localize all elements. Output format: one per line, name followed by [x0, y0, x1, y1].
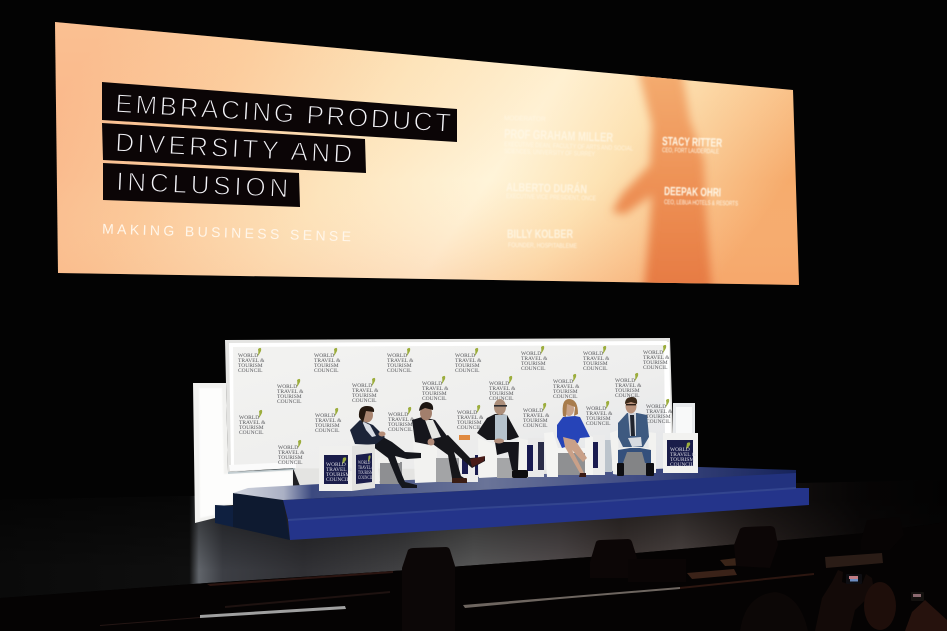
logo: TRAVEL & [553, 384, 580, 390]
logo: WORLD [615, 378, 635, 384]
logo [521, 346, 548, 372]
logo: WORLD [489, 381, 509, 387]
logo: WORLD [278, 445, 298, 451]
logo [314, 348, 341, 374]
floor [0, 480, 947, 598]
title line 1: EMBRACING PRODUCT [115, 88, 452, 138]
logo on cube side: TRAVEL & [358, 464, 374, 470]
logo on cube front: COUNCIL [326, 477, 350, 483]
logo: TOURISM [422, 391, 447, 397]
panellist 3 [477, 399, 528, 478]
speaker Stacy: STACY RITTER [662, 134, 723, 150]
logo: WORLD [238, 353, 258, 359]
logo: TRAVEL & [615, 383, 642, 389]
logo on cube front: WORLD [326, 462, 346, 468]
logo: TOURISM [278, 455, 303, 461]
logo on cube side: COUNCIL [358, 474, 373, 480]
logo: COUNCIL [352, 398, 377, 404]
logo: WORLD [315, 413, 335, 419]
logo: TRAVEL & [277, 389, 304, 395]
logo on cube front: TOURISM [326, 472, 350, 478]
logo: COUNCIL [239, 430, 264, 436]
speaker Deepak: DEEPAK OHRI [664, 184, 721, 199]
logo on cube front [326, 457, 353, 483]
subtitle: MAKING BUSINESS SENSE [102, 221, 351, 244]
logo: TOURISM [388, 422, 413, 428]
logo: COUNCIL [422, 396, 447, 402]
logo [523, 403, 550, 429]
audience with phones [740, 570, 947, 631]
logo: WORLD [352, 383, 372, 389]
speaker Billy: FOUNDER, HOSPITABLEME [508, 242, 578, 250]
speaker Alberto: ALBERTO DURÁN [506, 179, 587, 196]
table 3 [593, 435, 612, 475]
logo: TOURISM [387, 363, 412, 369]
logo: COUNCIL [277, 399, 302, 405]
speaker Deepak [664, 184, 738, 208]
logo [277, 379, 304, 405]
logo: TRAVEL & [455, 358, 482, 364]
logo: COUNCIL [314, 368, 339, 374]
logo [553, 374, 580, 400]
logo: COUNCIL [457, 425, 482, 431]
speaker Stacy [662, 134, 723, 156]
logo: COUNCIL [523, 423, 548, 429]
branded cube right [663, 433, 698, 473]
set: side panels [193, 383, 695, 523]
logo: TOURISM [643, 360, 668, 366]
silhouette figure on screen [612, 70, 712, 290]
logo: TRAVEL & [278, 450, 305, 456]
panel: projection screen [55, 22, 799, 290]
logo: TRAVEL & [315, 418, 342, 424]
chairs and side tables [350, 430, 656, 484]
logo: TRAVEL & [586, 411, 613, 417]
logo: TOURISM [239, 425, 264, 431]
logo [455, 348, 482, 374]
logo on cube: TRAVEL & [670, 452, 697, 458]
logo: COUNCIL [643, 365, 668, 371]
logo on cube: TOURISM [670, 457, 694, 463]
moderator [504, 115, 633, 158]
logo: TOURISM [583, 361, 608, 367]
logo: WORLD [314, 353, 334, 359]
speaker Billy: BILLY KOLBER [507, 227, 573, 241]
logo: TOURISM [315, 423, 340, 429]
logo [457, 405, 484, 431]
logo on cube side: WORLD [358, 459, 371, 465]
logo: TRAVEL & [314, 358, 341, 364]
logo: TOURISM [457, 420, 482, 426]
title line 3: INCLUSION [116, 166, 289, 203]
logo: COUNCIL [583, 366, 608, 372]
moderator: MODERATOR [504, 115, 546, 123]
logo: WORLD [643, 350, 663, 356]
panellist 5 [617, 397, 654, 476]
logo on cube side [358, 455, 374, 480]
logo: TOURISM [646, 414, 671, 420]
logo [643, 345, 670, 371]
logo: COUNCIL [238, 368, 263, 374]
logo on cube front: TRAVEL & [326, 467, 353, 473]
logo [387, 348, 414, 374]
logo: TRAVEL & [643, 355, 670, 361]
logo on cube: WORLD [670, 447, 690, 453]
logo [238, 348, 265, 374]
logo [278, 440, 305, 466]
moderator: PROF GRAHAM MILLER [504, 126, 614, 145]
logo: TOURISM [553, 389, 578, 395]
logo: TOURISM [277, 394, 302, 400]
logo: TRAVEL & [238, 358, 265, 364]
chair 2 [413, 438, 437, 483]
logo: TOURISM [314, 363, 339, 369]
logo: WORLD [277, 384, 297, 390]
logo on cube side: TOURISM [358, 469, 373, 475]
logo on cube: COUNCIL [670, 462, 694, 468]
logo: TOURISM [352, 393, 377, 399]
moderator: EXECUTIVE DEAN, FACULTY OF ARTS AND SOCIAL [504, 141, 633, 153]
stage monitors [402, 517, 904, 631]
logo [489, 376, 516, 402]
logo: TRAVEL & [489, 386, 516, 392]
logo: COUNCIL [586, 421, 611, 427]
backdrop wall with logos [225, 338, 673, 486]
speaker Alberto [506, 179, 597, 202]
logo [239, 410, 266, 436]
logo: COUNCIL [489, 396, 514, 402]
speaker Alberto: EXECUTIVE VICE PRESIDENT, ONCE [506, 193, 597, 202]
logo: COUNCIL [521, 366, 546, 372]
logo: WORLD [523, 408, 543, 414]
logo: COUNCIL [387, 368, 412, 374]
foreground barrier [0, 522, 947, 631]
logo: WORLD [586, 406, 606, 412]
logo: TRAVEL & [239, 420, 266, 426]
logo [586, 401, 613, 427]
logo [422, 376, 449, 402]
logo [646, 399, 673, 425]
speaker list [504, 115, 738, 250]
logo: WORLD [457, 410, 477, 416]
moderator: SCIENCES, UNIVERSITY OF SURREY [504, 148, 596, 158]
table 2 [527, 438, 544, 477]
logo: TRAVEL & [646, 409, 673, 415]
chair 3 [478, 438, 498, 478]
chair 5 [610, 430, 619, 475]
panellist 1 [350, 406, 421, 488]
logo: TOURISM [521, 361, 546, 367]
stage platform [215, 467, 809, 540]
logo: WORLD [521, 351, 541, 357]
title bars [102, 82, 457, 207]
logo: TRAVEL & [457, 415, 484, 421]
logo [315, 408, 342, 434]
table 1 [459, 435, 478, 482]
logo: TOURISM [455, 363, 480, 369]
chair 4 [544, 432, 558, 477]
speaker Stacy: CEO, FORT LAUDERDALE [662, 147, 720, 156]
logo: WORLD [553, 379, 573, 385]
panellist 4 [557, 399, 590, 477]
logo: WORLD [388, 412, 408, 418]
logo: TOURISM [615, 388, 640, 394]
logo [352, 378, 379, 404]
logo: WORLD [646, 404, 666, 410]
logo: TRAVEL & [523, 413, 550, 419]
chair 1 [350, 440, 380, 484]
logo: TOURISM [523, 418, 548, 424]
logo: TOURISM [238, 363, 263, 369]
speaker Deepak: CEO, LEBUA HOTELS & RESORTS [664, 199, 738, 208]
branded cube left [319, 444, 375, 491]
logo: COUNCIL [615, 393, 640, 399]
logo [388, 407, 415, 433]
logo: WORLD [239, 415, 259, 421]
logo [615, 373, 642, 399]
logo: WORLD [455, 353, 475, 359]
logo: COUNCIL [553, 394, 578, 400]
logo: COUNCIL [278, 460, 303, 466]
logo: TRAVEL & [387, 358, 414, 364]
logo: WORLD [422, 381, 442, 387]
logo on cube [670, 442, 697, 468]
logo: TRAVEL & [388, 417, 415, 423]
panellist 2 [412, 402, 485, 483]
logo: COUNCIL [315, 428, 340, 434]
logo: COUNCIL [455, 368, 480, 374]
logo: WORLD [387, 353, 407, 359]
logo: TRAVEL & [583, 356, 610, 362]
speaker Billy [507, 227, 578, 250]
logo [583, 346, 610, 372]
logo: TOURISM [586, 416, 611, 422]
logo: TOURISM [489, 391, 514, 397]
logo: TRAVEL & [422, 386, 449, 392]
logo: TRAVEL & [521, 356, 548, 362]
logo: WORLD [583, 351, 603, 357]
logo: TRAVEL & [352, 388, 379, 394]
title line 2: DIVERSITY AND [115, 127, 353, 169]
logo: COUNCIL [646, 419, 671, 425]
logo: COUNCIL [388, 427, 413, 433]
